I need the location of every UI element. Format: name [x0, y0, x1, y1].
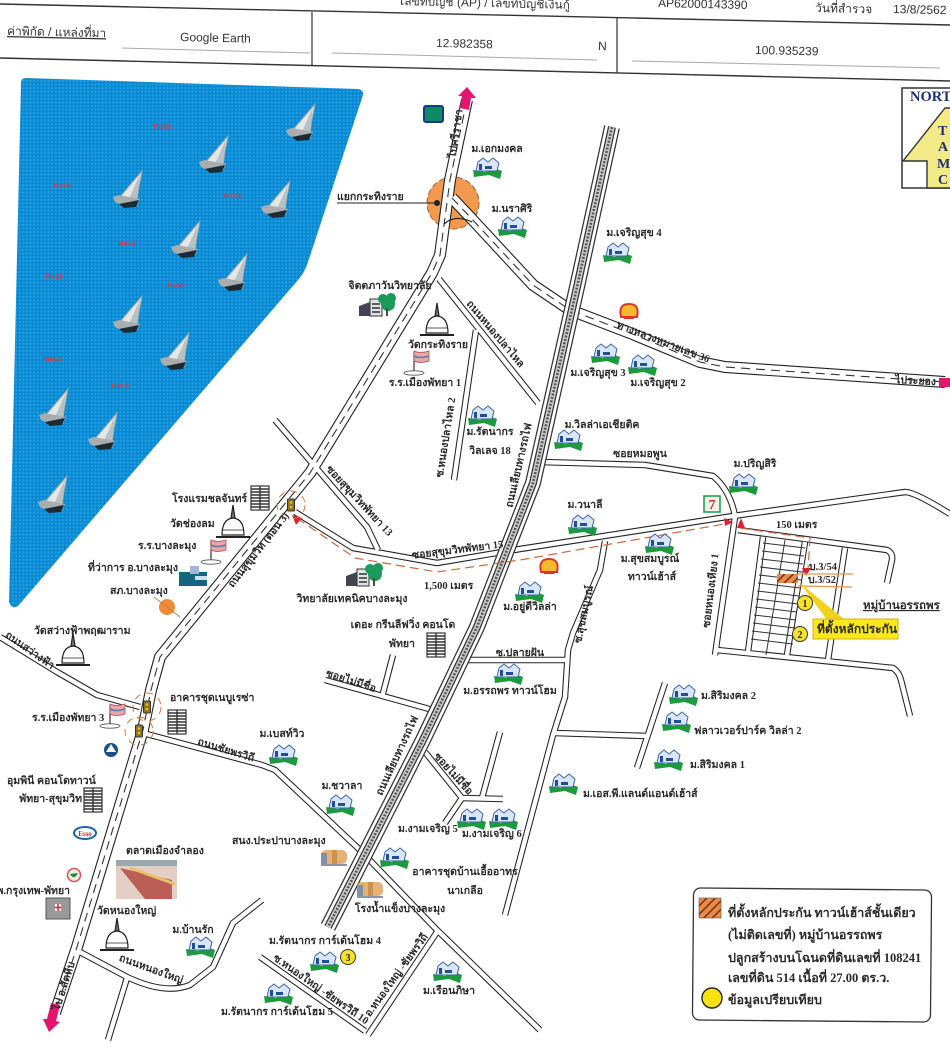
- road name labels: ไประยอง: [894, 373, 936, 388]
- comparable markers 1 2 3: 3: [346, 953, 350, 964]
- housing estates: ม.งามเจริญ 5: [398, 823, 458, 835]
- road name labels: ซ.หนองปลาไหล 2: [433, 397, 458, 478]
- panel: sea with sailboats: ทะเล: [153, 121, 171, 131]
- panel: sea with sailboats: ทะเล: [167, 280, 185, 290]
- housing estates: ม.เจริญสุข 3: [570, 367, 626, 380]
- housing estates: อาคารชุดบ้านเอื้ออาทร: [412, 863, 518, 879]
- header form strip: 13/8/2562: [893, 2, 947, 17]
- road name labels: ซอยไม่มีชื่อ: [431, 749, 477, 797]
- housing estates: ม.นราศิริ: [492, 203, 533, 215]
- header form strip: [0, 0, 950, 81]
- road name labels: ซอยหนองเหียง 1: [700, 553, 722, 628]
- road name labels: ถนนสว่างฟ้า: [3, 628, 57, 672]
- comparable markers 1 2 3: 2: [798, 630, 802, 641]
- orange junction marker: แยกกระทิงราย: แยกกระทิงราย: [337, 191, 404, 203]
- road name labels: ถนนหนองปลาไหล: [464, 297, 528, 370]
- housing estates: ฟลาวเวอร์ปาร์ค วิลล่า 2: [694, 724, 801, 737]
- landmarks: พัทยา: [389, 638, 415, 650]
- red route arrowheads: [292, 515, 811, 576]
- road name labels: อ.หนองใหญ่ -ชัยพรวิถี: [361, 930, 431, 1019]
- road name labels: ถนนเลียบทางรถไฟ: [503, 422, 535, 509]
- route distance labels: 1,500 เมตร: [424, 581, 474, 592]
- label: village name: หมู่บ้านอรรถพร: [863, 599, 941, 613]
- road name labels: ซอยสุขุมวิทพัทยา 15: [411, 538, 504, 563]
- housing estates: ม.ปริญสิริ: [734, 458, 777, 470]
- landmarks: ร.ร.บางละมุง: [138, 541, 196, 553]
- housing estates: ม.รัตนากร การ์เด้นโฮม 5: [221, 1005, 333, 1018]
- landmarks: อุมพินี คอนโดทาวน์: [7, 774, 97, 788]
- landmarks: ร.ร.เมืองพัทยา 3: [32, 711, 104, 724]
- housing estates: ม.บ้านรัก: [172, 923, 214, 936]
- housing estates: ม.เจริญสุข 2: [630, 377, 686, 390]
- housing estates: ม.รัตนากร การ์เด้นโฮม 4: [269, 934, 382, 947]
- panel: sea with sailboats: ทะเล: [53, 180, 71, 190]
- road name labels: ไปศรีราชา: [446, 108, 465, 160]
- landmarks: โรงแรมชลจันทร์: [171, 492, 248, 505]
- housing estates: ม.รัตนากร: [466, 426, 514, 438]
- icon: north arrow logo: A: [938, 140, 949, 155]
- landmarks: วัดสว่างฟ้าพฤฒาราม: [34, 624, 131, 637]
- comparable markers 1 2 3: 1: [802, 599, 808, 610]
- header form strip: 100.935239: [755, 43, 819, 58]
- landmarks: อาคารชุดเนบูเรซ่า: [170, 692, 254, 705]
- panel: sea with sailboats: ทะเล: [45, 271, 63, 281]
- road name labels: ไป อ.สัตหีบ: [49, 960, 78, 1013]
- housing estates: [172, 144, 801, 1018]
- housing estates: ม.ชวาลา: [322, 781, 363, 792]
- road name labels: ซ.ปลายฝัน: [496, 647, 545, 659]
- panel: legend: เลขที่ดิน 514 เนื้อที่ 27.00 ตร.ว.: [728, 968, 889, 985]
- housing estates: ม.เอกมงคล: [471, 144, 523, 155]
- landmarks: วิทยาลัยเทคนิคบางละมุง: [295, 593, 408, 606]
- header form strip: ค่าพิกัด / แหล่งที่มา: [7, 22, 106, 40]
- route distance labels: [424, 520, 818, 592]
- housing estates: ม.อรรถพร ทาวน์โฮม: [463, 684, 557, 697]
- housing estates: ม.วิลล่าเอเชียติค: [565, 418, 639, 431]
- housing estates: ม.สิริมงคล 1: [690, 759, 745, 771]
- housing estates: ม.อยู่ดีวิลล่า: [503, 600, 557, 614]
- callout: collateral location: [800, 583, 898, 639]
- panel: sea with sailboats: ทะเล: [223, 190, 241, 200]
- landmarks: สภ.บางละมุง: [110, 586, 168, 598]
- subject village plots: บ.3/52: [808, 575, 836, 586]
- subject village plots: [751, 540, 853, 655]
- subject village plots: บ.3/54: [809, 562, 838, 573]
- route distance labels: 150 เมตร: [776, 520, 818, 531]
- landmarks: ที่ว่าการ อ.บางละมุง: [88, 559, 178, 575]
- landmarks: [0, 106, 720, 950]
- road name labels: ซอยไม่มีชื่อ: [324, 665, 379, 695]
- landmarks: ตลาดเมืองจำลอง: [126, 844, 204, 857]
- landmarks: จิตตภาวันวิทยาลัย: [348, 280, 432, 292]
- icon: north arrow logo: C: [938, 173, 948, 188]
- landmarks: วัดหนองใหญ่: [97, 903, 156, 917]
- housing estates: ม.เจริญสุข 4: [606, 227, 662, 240]
- road name labels: ถนนหนองใหญ่: [117, 950, 185, 986]
- panel: sea with sailboats: ทะเล: [118, 238, 136, 248]
- panel: sea with sailboats: [9, 78, 363, 607]
- landmarks: Esso: [78, 830, 92, 838]
- header form strip: N: [598, 39, 607, 53]
- panel: legend: ข้อมูลเปรียบเทียบ: [728, 993, 822, 1008]
- panel: legend: (ไม่ติดเลขที่) หมู่บ้านอรรถพร: [728, 926, 883, 943]
- icon: north arrow logo: [902, 88, 950, 188]
- road name labels: ซ.สุขสมบูรณ์: [571, 584, 597, 645]
- landmarks: 7: [708, 498, 716, 513]
- icon: north arrow logo: M: [937, 157, 950, 172]
- landmarks: โรงน้ำแข็งบางละมุง: [354, 900, 445, 916]
- orange junction marker: แยกกระทิงราย: [337, 177, 479, 229]
- housing estates: นาเกลือ: [447, 884, 483, 897]
- panel: legend: ที่ตั้งหลักประกัน ทาวน์เฮ้าส์ชั้นเดียว: [728, 903, 916, 920]
- road name labels: ถนนชัยพรวิถี: [196, 735, 256, 764]
- panel: sea with sailboats: ทะเล: [44, 354, 62, 364]
- landmarks: วัดกระทิงราย: [408, 339, 468, 351]
- landmarks: สนง.ประปาบางละมุง: [232, 835, 326, 848]
- housing estates: ม.สิริมงคล 2: [701, 690, 756, 702]
- route distance markers: [297, 518, 810, 572]
- panel: legend: [692, 888, 932, 1022]
- road name labels: ถนนเลียบทางรถไฟ: [373, 714, 421, 797]
- road name labels: ทางหลวงหมายเลข 36: [615, 320, 711, 365]
- housing estates: ม.เรือนภิษา: [423, 984, 475, 997]
- road name labels: ซ.หนองใหญ่ -ชัยพรวิถี 10: [271, 950, 372, 1027]
- icon: north arrow logo: T: [938, 124, 948, 139]
- landmarks: พัทยา-สุขุมวิท: [19, 793, 82, 806]
- callout: collateral location: ที่ตั้งหลักประกัน: [817, 619, 898, 636]
- comparable markers 1 2 3: [340, 596, 812, 964]
- road name labels: ถนนสุขุมวิท (ตอน 3): [226, 510, 293, 591]
- header form strip: วันที่สำรวจ: [815, 0, 872, 16]
- header form strip: 12.982358: [436, 36, 493, 51]
- railway line: [328, 127, 612, 927]
- road name labels: ซอยหมอพูน: [613, 449, 668, 461]
- housing estates: ม.วนาลี: [568, 498, 602, 511]
- housing estates: ม.เอส.พี.แลนด์แอนด์เฮ้าส์: [583, 787, 698, 800]
- landmarks: วัดช่องลม: [170, 518, 215, 530]
- landmarks: ร.ร.เมืองพัทยา 1: [389, 376, 461, 389]
- road name labels: ซอยสุขุมวิทพัทยา 13: [323, 463, 395, 539]
- landmarks: เดอะ กรีนลีฟวิ่ง คอนโด: [351, 616, 455, 631]
- panel: sea with sailboats: ทะเล: [111, 380, 129, 390]
- panel: legend: ปลูกสร้างบนโฉนดที่ดินเลขที่ 108241: [728, 949, 921, 966]
- housing estates: ม.งามเจริญ 6: [462, 828, 522, 840]
- housing estates: ม.เบสท์วิว: [260, 727, 305, 740]
- header form strip: Google Earth: [180, 30, 251, 46]
- housing estates: ทาวน์เฮ้าส์: [628, 570, 677, 583]
- housing estates: วิลเลจ 18: [468, 445, 511, 457]
- housing estates: ม.สุขสมบูรณ์: [621, 552, 680, 566]
